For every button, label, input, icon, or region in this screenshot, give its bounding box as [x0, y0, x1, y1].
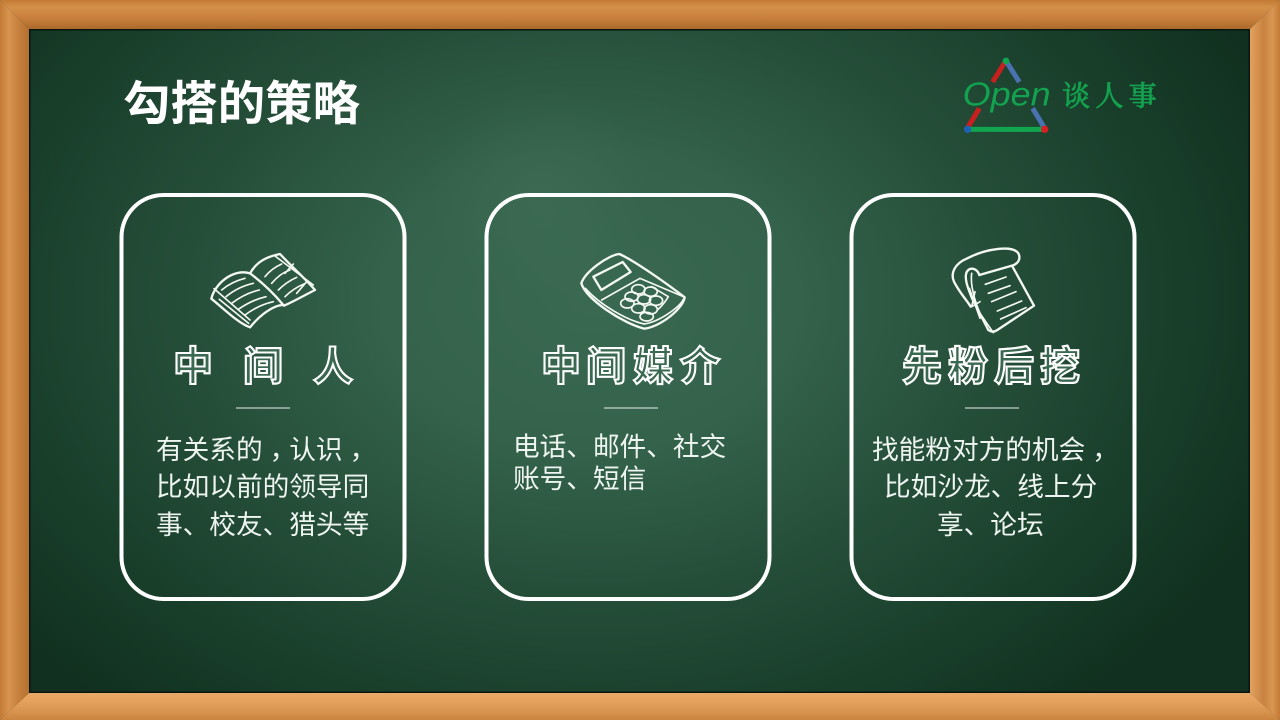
panel: 先粉后挖 [852, 195, 1134, 599]
heading: 中间媒介 [541, 345, 720, 389]
icon: calculator [581, 254, 685, 329]
title: 勾搭的策略 [123, 78, 361, 131]
body text: 账号、短信 [513, 464, 646, 494]
body text: 找能粉对方的机会 ， [872, 435, 1119, 465]
panel: 中间人 [122, 195, 404, 599]
logo: Open 谈人事 [963, 58, 1157, 133]
divider [236, 407, 290, 409]
body text: 比如沙龙、线上分 [884, 472, 1097, 502]
heading: 先粉后挖 [902, 345, 1080, 389]
heading: 中间人 [173, 345, 353, 389]
body text: 比如以前的领导同 [156, 472, 369, 502]
logo Chinese name: 谈人事 [1062, 80, 1157, 112]
card outline [486, 195, 770, 599]
panel: 中间媒介 [486, 195, 770, 599]
divider [604, 407, 658, 409]
logo triangle [964, 58, 1048, 133]
icon: open book [211, 254, 315, 327]
icon: scroll note [953, 249, 1034, 333]
body text: 享、论坛 [937, 510, 1044, 540]
body text: 事、校友、猎头等 [156, 510, 369, 540]
body text: 有关系的 ，认识 ， [156, 435, 376, 465]
divider [965, 407, 1019, 409]
body text: 电话、邮件、社交 [513, 432, 726, 462]
logo wordmark: Open [963, 77, 1051, 114]
card outline [122, 195, 404, 599]
card outline [852, 195, 1134, 599]
